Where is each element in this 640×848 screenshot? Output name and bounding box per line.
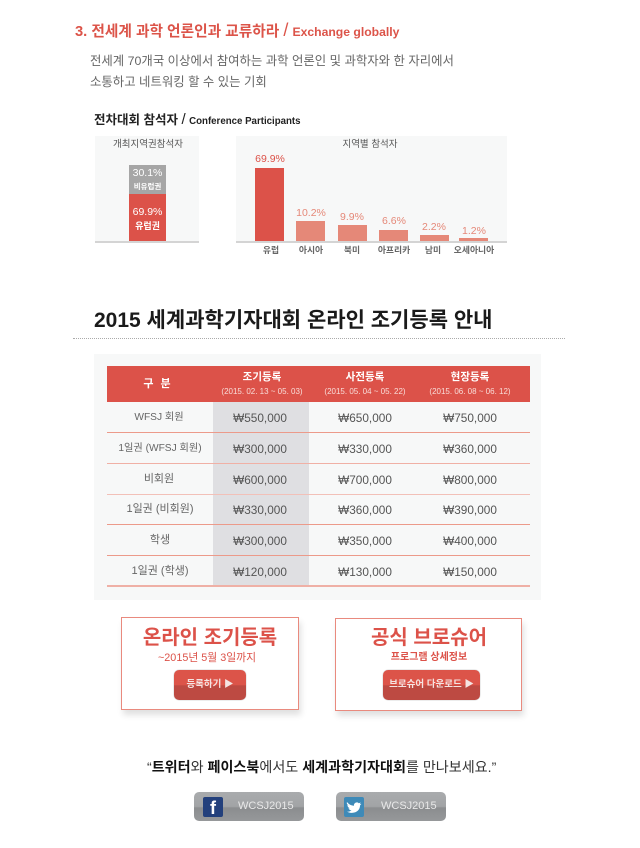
highlighted early registration column [213, 402, 309, 586]
button: twitter [336, 792, 446, 821]
stacked segment: Europe [129, 194, 166, 241]
value: Oceania: 1.2% [462, 225, 486, 237]
value: Africa: 6.6% [382, 215, 406, 227]
header: on-site registration: 현장등록 [451, 371, 489, 383]
header: advance dates: (2015. 05. 04 ~ 05. 22) [324, 387, 406, 396]
header: on-site dates: (2015. 06. 08 ~ 06. 12) [429, 387, 511, 396]
chart title: 지역별 참석자 [342, 139, 398, 150]
baseline [236, 241, 507, 243]
on-site price: ₩400,000 [443, 534, 497, 548]
stacked segment: non-Europe: 비유럽권 [134, 182, 161, 191]
row: one-day student [132, 564, 497, 579]
row: student [150, 534, 497, 548]
deadline text: ~2015년 5월 3일까지 [158, 652, 256, 664]
panel: official brochure [335, 618, 522, 711]
icon: facebook [203, 797, 223, 817]
main title: 2015 세계과학기자대회 온라인 조기등록 안내 [94, 309, 492, 332]
body text: 전세계 70개국 이상에서 참여하는 과학 언론인 및 과학자와 한 자리에서 [90, 54, 454, 68]
on-site price: ₩360,000 [443, 442, 497, 456]
advance price: ₩330,000 [338, 442, 392, 456]
early price: ₩120,000 [233, 565, 287, 579]
panel: online early registration [121, 617, 299, 710]
label: Africa: 아프리카 [378, 245, 410, 255]
value: North America: 9.9% [340, 211, 364, 223]
row label: WFSJ 회원 [134, 412, 184, 423]
button: download brochure: 브로슈어 다운로드 ▶ [389, 679, 474, 690]
button: register [174, 670, 246, 700]
early price: ₩300,000 [233, 442, 287, 456]
bar: Africa [379, 230, 408, 241]
stacked segment: Europe: 69.9% [133, 206, 162, 218]
on-site price: ₩750,000 [443, 411, 497, 425]
row: non-member [144, 472, 497, 487]
advance price: ₩350,000 [338, 534, 392, 548]
label: Oceania: 오세아니아 [454, 245, 494, 255]
panel: participants by region bar chart [236, 136, 507, 243]
bar: Oceania [459, 238, 488, 241]
row: WFSJ member [134, 411, 497, 425]
closing quote: “트위터와 페이스북에서도 세계과학기자대회를 만나보세요.” [147, 759, 496, 775]
row: one-day non-member [126, 502, 497, 517]
on-site price: ₩150,000 [443, 565, 497, 579]
stacked segment: Europe: 유럽권 [135, 221, 160, 231]
label: Asia: 아시아 [299, 245, 323, 255]
table header [107, 366, 530, 402]
early price: ₩600,000 [233, 473, 287, 487]
label: North America: 북미 [344, 245, 360, 255]
row label: 1일권 (학생) [132, 565, 188, 577]
stacked segment: non-Europe [129, 165, 166, 194]
value: Europe: 69.9% [255, 153, 285, 165]
icon: facebook: f [210, 798, 216, 818]
bar: Europe [255, 168, 284, 241]
header: advance registration: 사전등록 [346, 371, 384, 383]
button: facebook [194, 792, 304, 821]
chart title: 개최지역권참석자 [113, 139, 183, 150]
early price: ₩300,000 [233, 534, 287, 548]
baseline [95, 241, 199, 243]
body text [90, 54, 454, 89]
advance price: ₩700,000 [338, 473, 392, 487]
header: category: 구 분 [143, 378, 171, 390]
subheading: 프로그램 상세정보 [391, 652, 467, 663]
on-site price: ₩390,000 [443, 503, 497, 517]
early price: ₩330,000 [233, 503, 287, 517]
advance price: ₩130,000 [338, 565, 392, 579]
row label: 1일권 (비회원) [126, 503, 194, 515]
button: download brochure [383, 670, 480, 700]
panel heading: 온라인 조기등록 [143, 627, 277, 649]
advance price: ₩650,000 [338, 411, 392, 425]
row: one-day WFSJ member [118, 442, 497, 456]
bar: Asia [296, 221, 325, 241]
row label: 1일권 (WFSJ 회원) [118, 443, 202, 454]
label: Europe: 유럽 [263, 245, 279, 255]
row label: 비회원 [144, 473, 174, 485]
body text: 소통하고 네트워킹 할 수 있는 기회 [90, 75, 267, 89]
icon: twitter [344, 797, 364, 817]
advance price: ₩360,000 [338, 503, 392, 517]
handle: WCSJ2015 [381, 800, 437, 812]
participants heading: 전차대회 참석자 / Conference Participants [94, 111, 301, 128]
handle: WCSJ2015 [238, 800, 294, 812]
stacked segment: non-Europe: 30.1% [133, 167, 162, 179]
bar: South America [420, 235, 449, 241]
label: South America: 남미 [425, 245, 441, 255]
bar: North America [338, 225, 367, 241]
header: early dates: (2015. 02. 13 ~ 05. 03) [221, 387, 303, 396]
value: Asia: 10.2% [296, 207, 326, 219]
button: register: 등록하기 ▶ [186, 679, 234, 690]
on-site price: ₩800,000 [443, 473, 497, 487]
header: early registration: 조기등록 [243, 371, 281, 383]
value: South America: 2.2% [422, 221, 446, 233]
section heading: exchange globally: 3. 전세계 과학 언론인과 교류하라 / Exchange globally [75, 20, 399, 40]
panel: registration fee table [94, 354, 541, 600]
early price: ₩550,000 [233, 411, 287, 425]
panel: host region participants chart [95, 136, 199, 243]
row label: 학생 [150, 534, 170, 546]
panel heading: 공식 브로슈어 [371, 627, 487, 649]
